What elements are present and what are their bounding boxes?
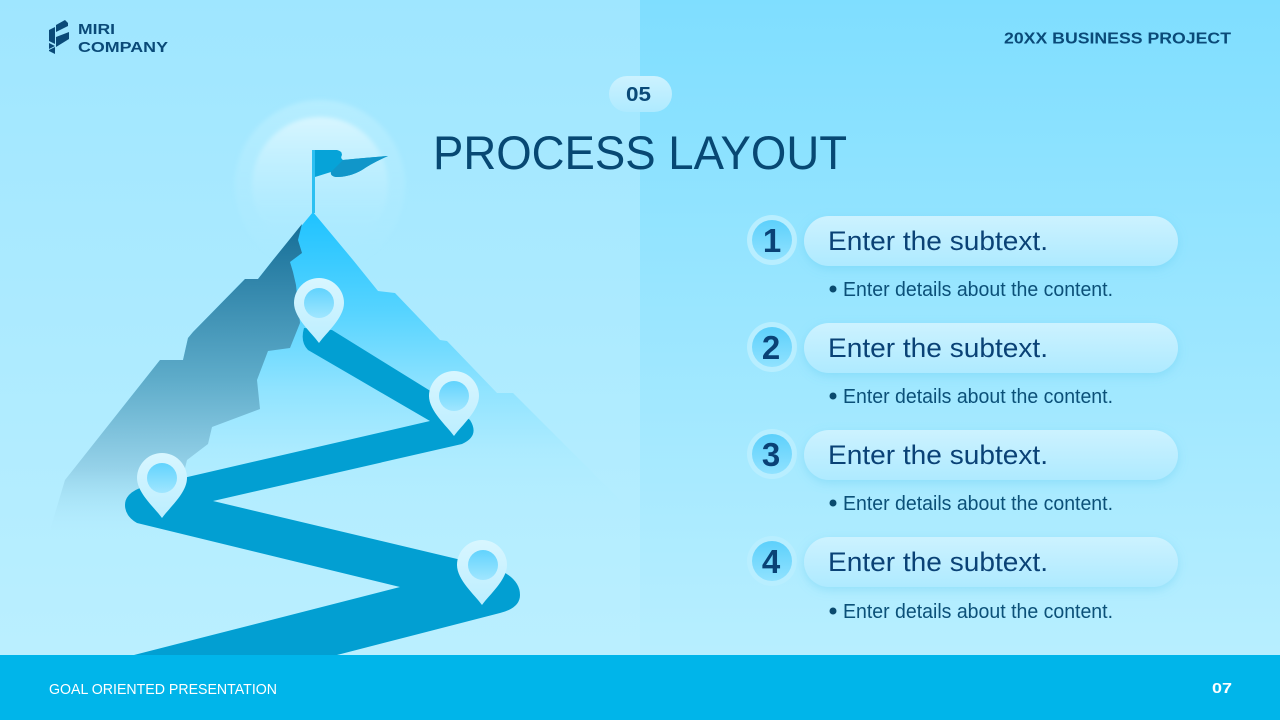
logo text: MIRI [78,21,115,38]
panel: left background [0,0,640,720]
step 4 heading pill [804,537,1178,587]
logo text [78,21,168,56]
step 3 details: Enter details about the content. [843,493,1113,515]
panel: right background [640,0,1280,720]
icon: flag [312,150,388,213]
step 4 number: 4 [762,543,781,580]
badge: section number: 05 [626,84,651,106]
step 1 heading pill [804,216,1178,266]
step 3 heading pill: Enter the subtext. [828,440,1048,470]
sun halo [235,100,405,270]
step 3 number [747,429,797,479]
icon: logo mark [49,20,69,54]
pin 4 [457,540,507,605]
step 1 heading pill: Enter the subtext. [828,226,1048,256]
step 3 [747,429,1178,515]
illustration: mountain with route [50,100,640,655]
step 1 [747,215,1178,301]
badge: section number [609,76,672,112]
step 3 heading pill [804,430,1178,480]
step 2 heading pill [804,323,1178,373]
route path [125,328,520,655]
logo text: COMPANY [78,39,168,56]
page number: 07 [1212,680,1232,697]
step 2 number: 2 [762,329,780,366]
step 2 [747,322,1178,408]
step 4 heading pill: Enter the subtext. [828,547,1048,577]
mountain body [50,212,640,530]
header label: 20XX BUSINESS PROJECT [1004,30,1232,48]
step 1 number: 1 [763,222,781,259]
footer label: GOAL ORIENTED PRESENTATION [49,681,277,698]
step 2 heading pill: Enter the subtext. [828,333,1048,363]
mountain shadow side [50,224,302,530]
step 4 details: Enter details about the content. [843,601,1113,623]
title: PROCESS LAYOUT [433,126,847,179]
footer bar [0,655,1280,720]
step 4 [747,536,1178,623]
pin 1 [294,278,344,343]
pin 3 [137,453,187,518]
step 3 number: 3 [762,436,780,473]
step 1 number [747,215,797,265]
step 4 number [747,536,797,586]
step 1 details: Enter details about the content. [843,279,1113,301]
pin 2 [429,371,479,436]
step 2 details: Enter details about the content. [843,386,1113,408]
step 2 number [747,322,797,372]
logo: Miri Company [49,20,168,56]
